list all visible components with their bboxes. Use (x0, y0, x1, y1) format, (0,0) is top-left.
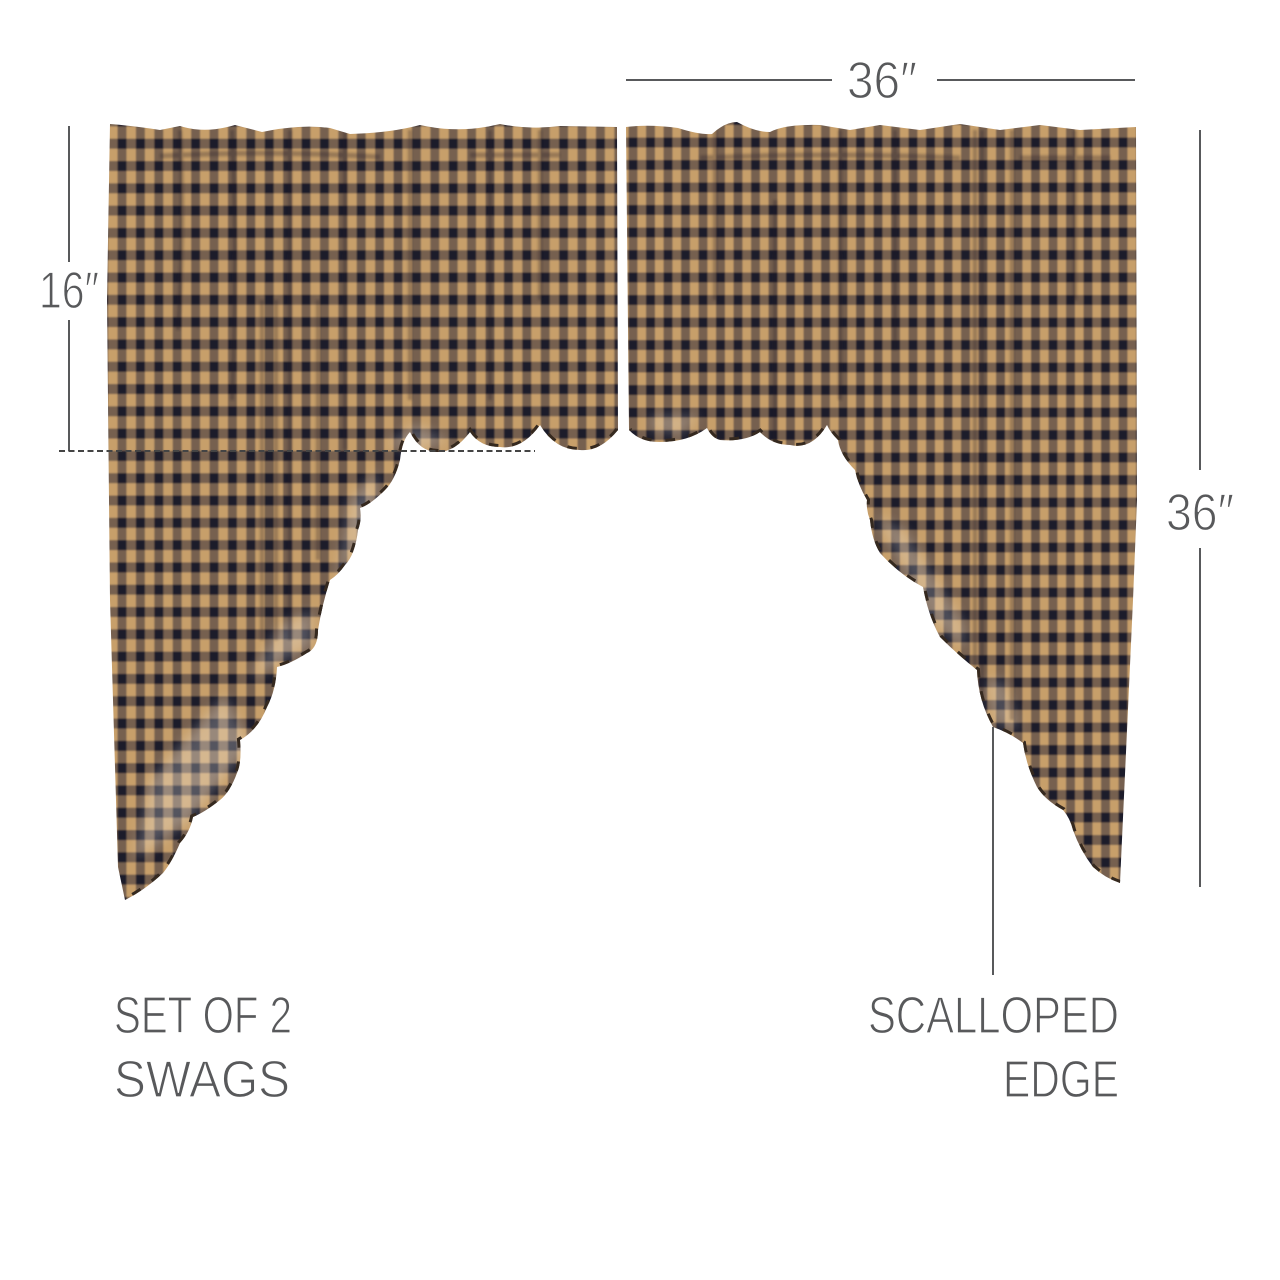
label: set of 2 swags: SWAGS (114, 1051, 290, 1109)
label: scalloped edge: SCALLOPED (868, 987, 1119, 1045)
callout line to scalloped edge (992, 727, 994, 975)
swag curtain set diagram (42, 62, 1232, 1097)
pleat shading (160, 130, 560, 640)
length dimension: 36 inches: 36″ (1166, 484, 1234, 542)
light patches on left swag (135, 425, 450, 860)
drop dimension: 16 inches: 16″ (39, 262, 99, 320)
label: set of 2 swags (114, 987, 292, 1109)
pleat shading (700, 130, 1110, 720)
left swag curtain (100, 115, 630, 915)
width dimension: 36 inches: 36″ (847, 52, 917, 110)
light patches on right swag (650, 415, 1020, 730)
dashed reference line (59, 450, 535, 452)
right swag curtain (620, 115, 1145, 895)
scalloped hem: right (629, 425, 1120, 883)
label: scalloped edge (868, 987, 1119, 1109)
label: set of 2 swags: SET OF 2 (114, 987, 292, 1045)
scalloped hem: left (125, 425, 618, 900)
label: scalloped edge: EDGE (1003, 1051, 1119, 1109)
